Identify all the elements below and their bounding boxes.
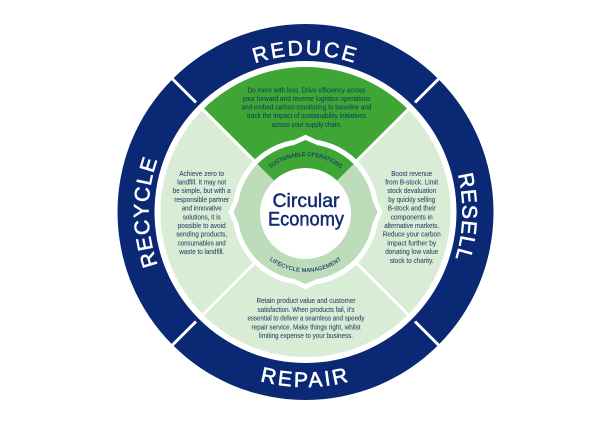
text block: repair: [248, 296, 365, 340]
panel: sectors: [160, 67, 450, 357]
text block: repair: Retain product value and customer: [256, 296, 356, 305]
text block: reduce: your forward and reverse logistics operations: [242, 94, 371, 103]
label: sustainable operations: SUSTAINABLE OPERATIONS: [268, 152, 342, 168]
text block: recycle: [173, 169, 231, 256]
text block: resell: [383, 169, 441, 265]
text block: resell: Boost revenue: [391, 169, 432, 178]
text block: repair: limiting expense to your business.: [259, 331, 353, 340]
text block: recycle: possible to avoid: [178, 221, 226, 230]
text block: recycle: sending products,: [176, 230, 227, 239]
center circle title: Economy: [268, 210, 344, 230]
outer navy ring: [118, 24, 494, 400]
text block: reduce: track the impact of sustainability initiatives: [247, 111, 366, 120]
text block: resell: from B-stock. Limit: [385, 178, 438, 186]
text block: resell: stock devaluation: [387, 186, 436, 195]
text block: resell: alternative markets.: [384, 221, 439, 230]
text block: recycle: be simple, but with a: [173, 186, 231, 195]
center circle title: Circular: [272, 191, 340, 212]
text block: resell: B-stock and their: [388, 204, 436, 213]
heading: repair: REPAIR: [261, 367, 348, 388]
text block: reduce: across your supply chain.: [272, 120, 342, 129]
text block: reduce: [242, 86, 372, 129]
text block: recycle: solutions, it is: [183, 212, 221, 221]
text block: reduce: and embed carbon monitoring to baseline and: [242, 103, 372, 112]
text block: resell: by quickly selling: [388, 195, 435, 204]
text block: recycle: responsible partner: [174, 195, 230, 204]
text block: recycle: waste to landfill.: [178, 247, 224, 256]
label: lifecycle management: LIFECYCLE MANAGEMENT: [270, 256, 340, 272]
text block: repair: essential to deliver a seamless and speedy: [248, 314, 365, 323]
text block: resell: donating low value: [385, 247, 438, 256]
center circle title: [260, 168, 351, 259]
panel: central hub ring: [228, 135, 383, 289]
text block: recycle: Achieve zero to: [179, 169, 224, 178]
heading: recycle: RECYCLE: [134, 156, 158, 268]
text block: resell: components in: [391, 212, 433, 221]
text block: recycle: consumables and: [178, 238, 226, 247]
text block: reduce: Do more with less. Drive efficiency across: [248, 86, 366, 94]
text block: resell: impact further by: [387, 238, 436, 247]
text block: recycle: landfill. It may not: [177, 178, 226, 186]
text block: recycle: and innovative: [182, 204, 222, 213]
heading: resell: RESELL: [455, 172, 478, 258]
text block: repair: repair service. Make things right, whilst: [252, 322, 360, 331]
heading: reduce: REDUCE: [252, 40, 357, 63]
text block: resell: stock to charity.: [390, 256, 434, 265]
text block: repair: satisfaction. When products fail, it's: [258, 305, 355, 314]
text block: resell: Reduce your carbon: [383, 230, 441, 239]
